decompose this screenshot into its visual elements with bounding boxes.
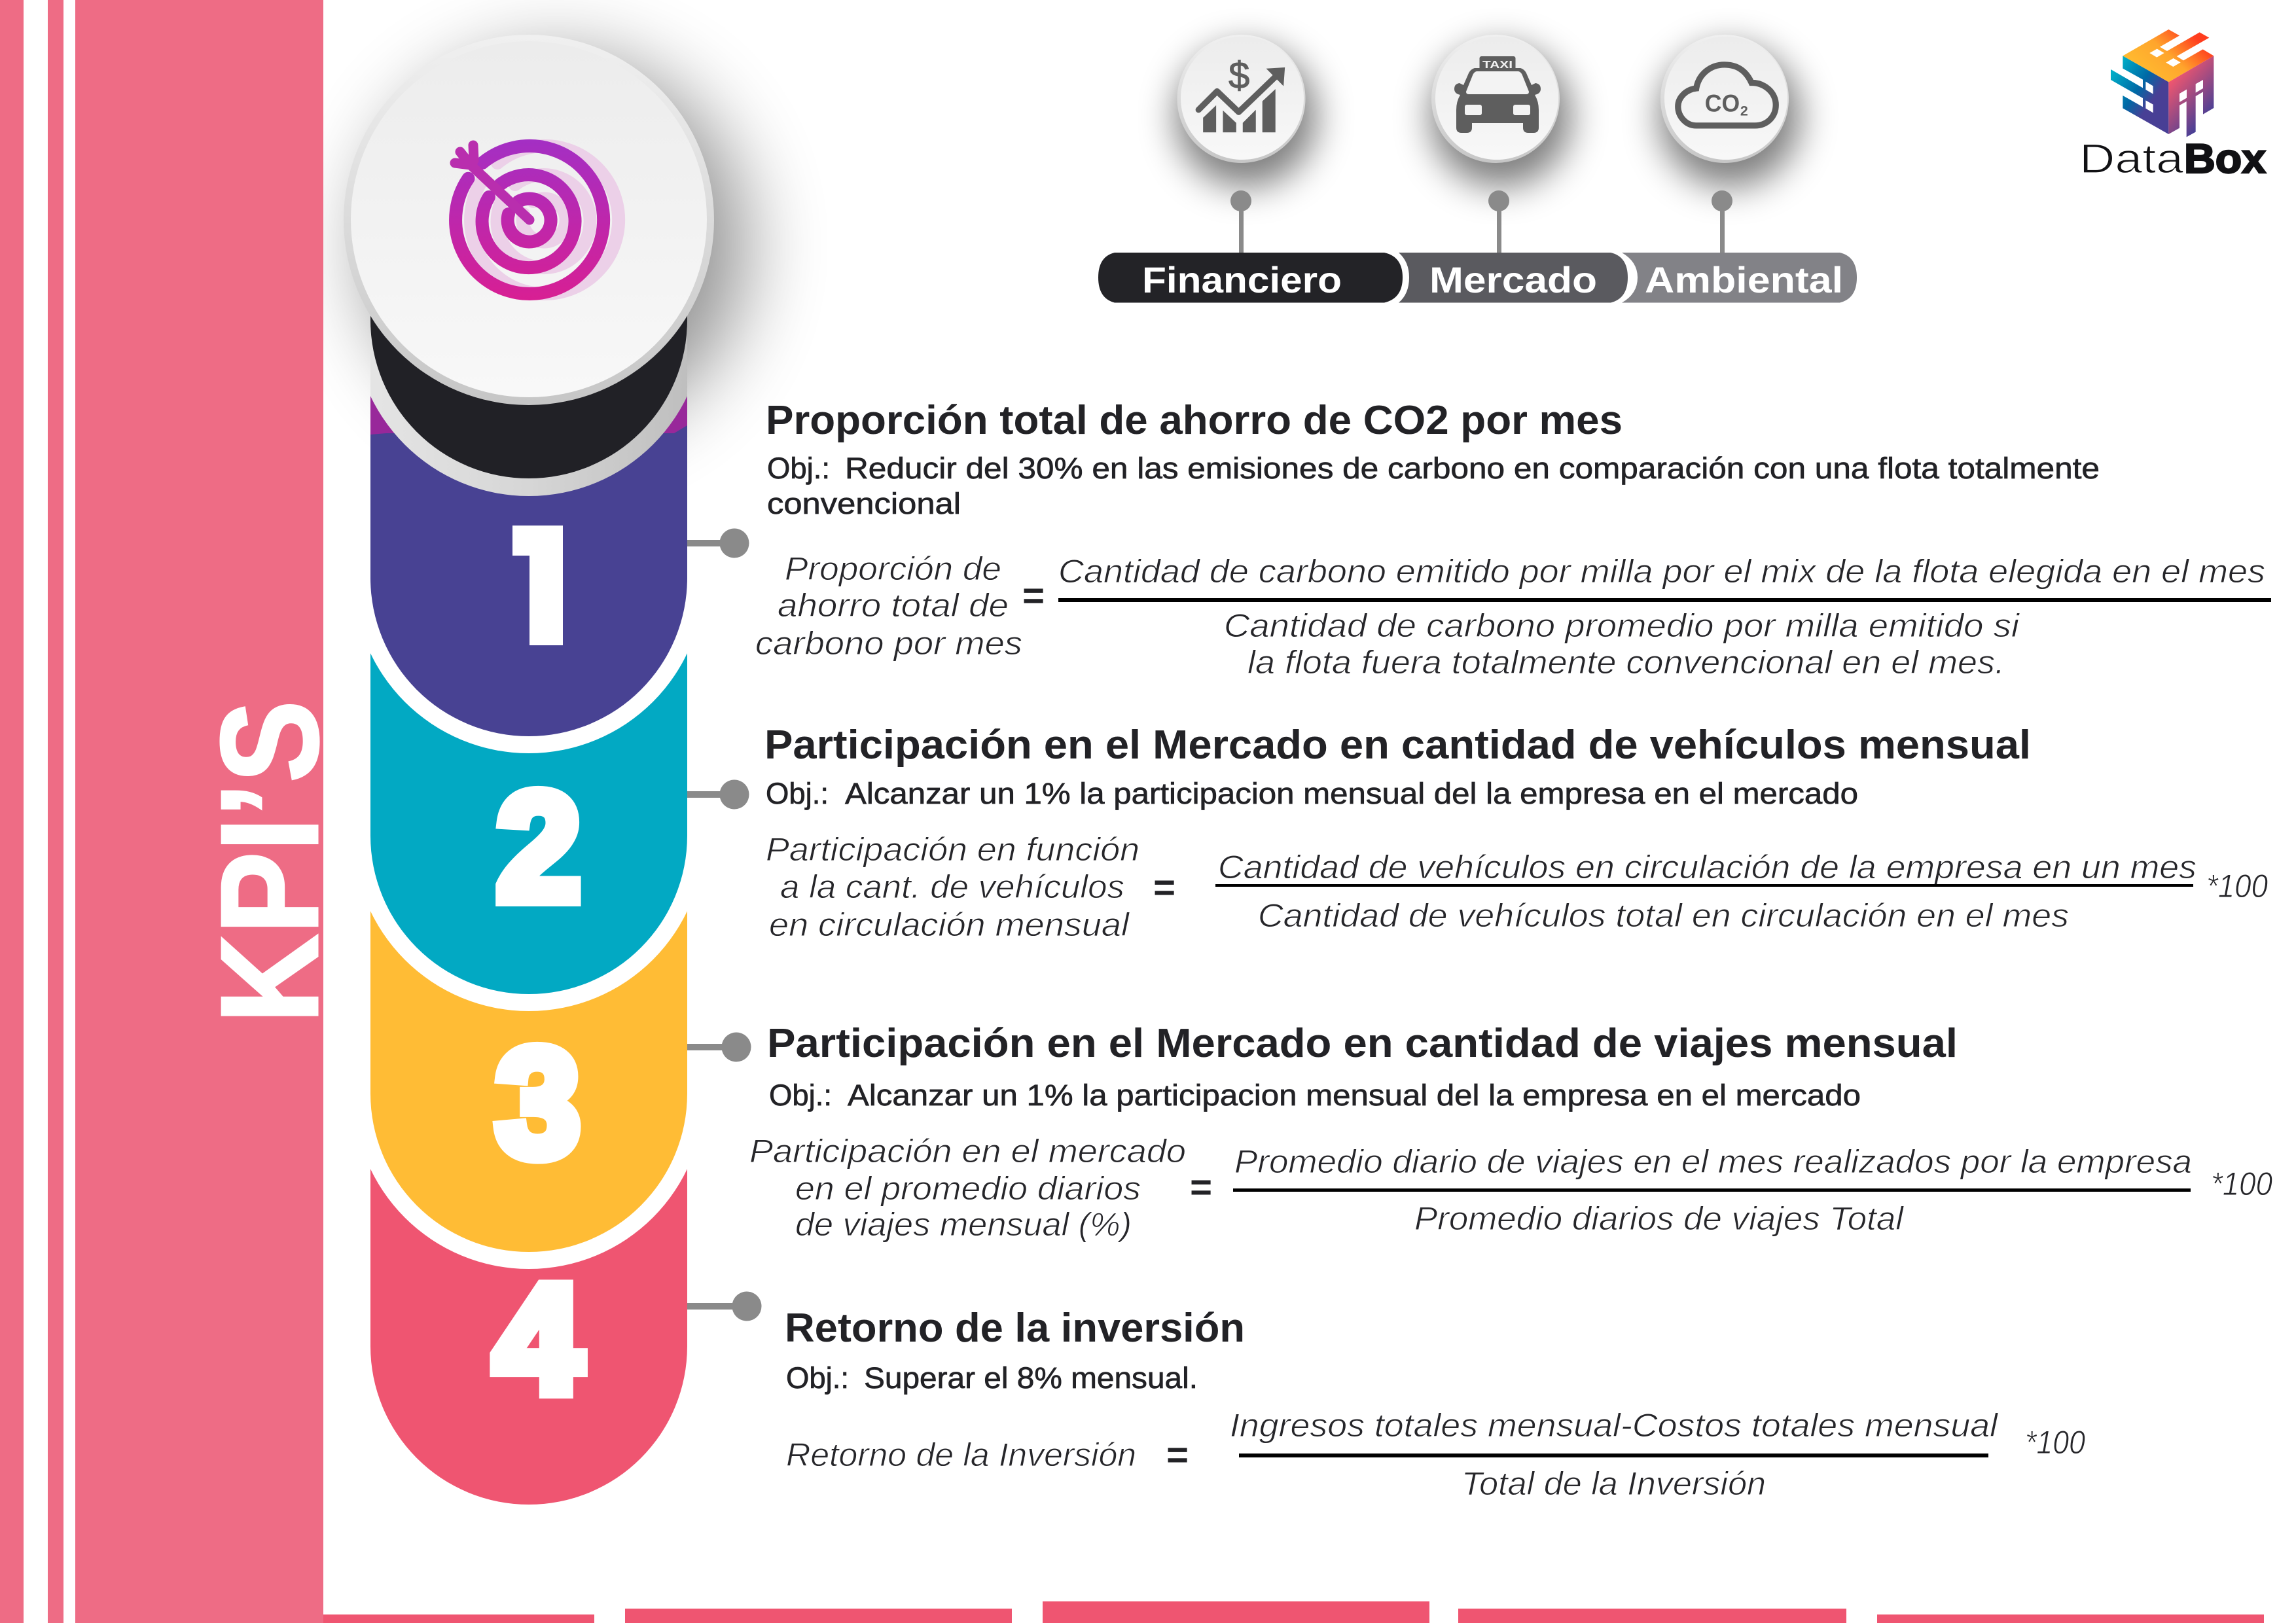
formula 2 fraction: Cantidad de vehículos total en circulación en el mes — [1258, 897, 2069, 934]
pill 2: KPI 2: 2 — [497, 760, 581, 933]
heading 2: Participación en el Mercado en cantidad de vehículos mensual — [764, 722, 2031, 768]
formula 3 label: de viajes mensual (%) — [795, 1206, 1132, 1243]
pill 4: KPI 4 — [370, 1113, 687, 1505]
formula 3 label: Participación en el mercado — [749, 1133, 1186, 1169]
tab: Financiero: Financiero — [1142, 259, 1342, 300]
objective 2: Alcanzar un 1% la participacion mensual del la empresa en el mercado — [845, 777, 1858, 810]
objective 3: Alcanzar un 1% la participacion mensual del la empresa en el mercado — [848, 1079, 1861, 1112]
formula 1 label: Proporción de — [785, 550, 1001, 587]
icon: CO2 cloud — [1678, 65, 1776, 126]
category: Financiero — [1175, 35, 1317, 253]
formula 4 fraction — [1230, 1407, 1999, 1502]
icon: CO2 cloud: CO — [1705, 90, 1740, 117]
tab: Mercado — [1388, 253, 1638, 302]
icon: taxi — [1454, 56, 1541, 133]
top disc with target icon — [344, 35, 714, 405]
formula 3 fraction: Promedio diarios de viajes Total — [1414, 1200, 1905, 1237]
formula 1 fraction: Cantidad de carbono emitido por milla por el mix de la flota elegida en el mes — [1058, 553, 2265, 590]
connector KPI 3 — [687, 1033, 751, 1061]
left pink band — [0, 0, 323, 1623]
connector KPI 2 — [687, 780, 749, 809]
formula 3 fraction: Promedio diario de viajes en el mes realizados por la empresa — [1234, 1143, 2192, 1180]
pill 4: KPI 4: 4 — [494, 1253, 582, 1425]
logo: DataBox — [2079, 29, 2266, 182]
shadow of the top disc — [367, 56, 746, 435]
icon: money chart — [1198, 54, 1285, 132]
pill 1: KPI 1: 1 — [496, 494, 588, 677]
formula 3 fraction — [1233, 1143, 2192, 1237]
icon: money chart: $ — [1229, 54, 1249, 96]
formula 4 label: Retorno de la Inversión — [786, 1436, 1136, 1473]
pill 3: KPI 3 — [370, 911, 687, 1269]
pill 2: KPI 2 — [370, 653, 687, 1011]
equals 3: = — [1190, 1166, 1212, 1209]
tab: Financiero — [1098, 253, 1409, 302]
formula 1 fraction — [1058, 553, 2271, 681]
formula 1 label — [755, 550, 1022, 662]
formula 4 fraction: Ingresos totales mensual-Costos totales mensual — [1230, 1407, 1999, 1444]
category: Ambiental — [1659, 35, 1801, 253]
objective 4: Obj.: — [786, 1361, 849, 1395]
logo wordmark — [2079, 136, 2266, 182]
tab: Ambiental — [1617, 253, 1857, 302]
section 3: trips market share KPI — [749, 1021, 2272, 1243]
objective 1: convencional — [767, 487, 961, 520]
formula 2 label — [766, 831, 1139, 943]
heading 1: Proporción total de ahorro de CO2 por mes — [766, 398, 1623, 443]
icon: target — [455, 145, 619, 294]
formula 1 fraction: la flota fuera totalmente convencional en el mes. — [1247, 644, 2005, 681]
formula 2 label: en circulación mensual — [769, 906, 1130, 943]
formula 1 fraction: Cantidad de carbono promedio por milla emitido si — [1224, 607, 2020, 644]
logo wordmark: Data — [2079, 136, 2184, 182]
section 4: ROI KPI — [785, 1306, 2085, 1502]
multiplier 3: *100 — [2211, 1166, 2272, 1202]
heading 3: Participación en el Mercado en cantidad de viajes mensual — [767, 1021, 1958, 1066]
objective 1: Obj.: — [767, 452, 830, 485]
category: Mercado — [1430, 35, 1571, 253]
section 2: vehicle market share KPI — [764, 722, 2268, 943]
equals 1: = — [1022, 575, 1045, 617]
equals 2: = — [1153, 866, 1175, 909]
objective 2: Obj.: — [766, 777, 829, 810]
pill 3: KPI 3: 3 — [496, 1016, 580, 1188]
panel: KPI column — [370, 315, 687, 1505]
icon: taxi: TAXI — [1482, 60, 1513, 71]
dark cap below the disc — [370, 315, 687, 496]
formula 2 fraction: Cantidad de vehículos en circulación de la empresa en un mes — [1218, 849, 2197, 885]
heading 4: Retorno de la inversión — [785, 1306, 1245, 1351]
tab: Mercado: Mercado — [1429, 259, 1597, 300]
equals 4: = — [1166, 1434, 1189, 1476]
vertical title: KPI’S — [192, 700, 347, 1024]
connector KPI 1 — [687, 529, 749, 558]
bottom bars — [323, 1601, 2264, 1623]
objective 3: Obj.: — [769, 1079, 832, 1112]
logo wordmark: Box — [2184, 136, 2266, 182]
formula 3 label: en el promedio diarios — [795, 1170, 1141, 1207]
objective 4: Superar el 8% mensual. — [864, 1361, 1198, 1395]
pill 1: KPI 1 — [370, 397, 687, 753]
multiplier 2: *100 — [2206, 868, 2268, 904]
icon: CO2 cloud: 2 — [1740, 103, 1748, 118]
formula 2 fraction — [1215, 849, 2197, 934]
objective 1: Reducir del 30% en las emisiones de carbono en comparación con una flota totalmente — [845, 452, 2100, 485]
connector KPI 4 — [687, 1292, 762, 1321]
formula 1 label: ahorro total de — [778, 587, 1009, 624]
formula 1 label: carbono por mes — [755, 625, 1022, 662]
tab: Ambiental: Ambiental — [1645, 259, 1843, 300]
multiplier 4: *100 — [2025, 1424, 2085, 1461]
section 1: CO2 savings KPI — [755, 398, 2271, 681]
formula 2 label: Participación en función — [766, 831, 1139, 868]
formula 3 label — [749, 1133, 1186, 1243]
logo cube — [2111, 29, 2214, 137]
objective 1 — [767, 452, 2100, 520]
formula 2 label: a la cant. de vehículos — [780, 868, 1124, 905]
formula 4 fraction: Total de la Inversión — [1462, 1465, 1766, 1502]
category tabs — [1098, 253, 1857, 302]
